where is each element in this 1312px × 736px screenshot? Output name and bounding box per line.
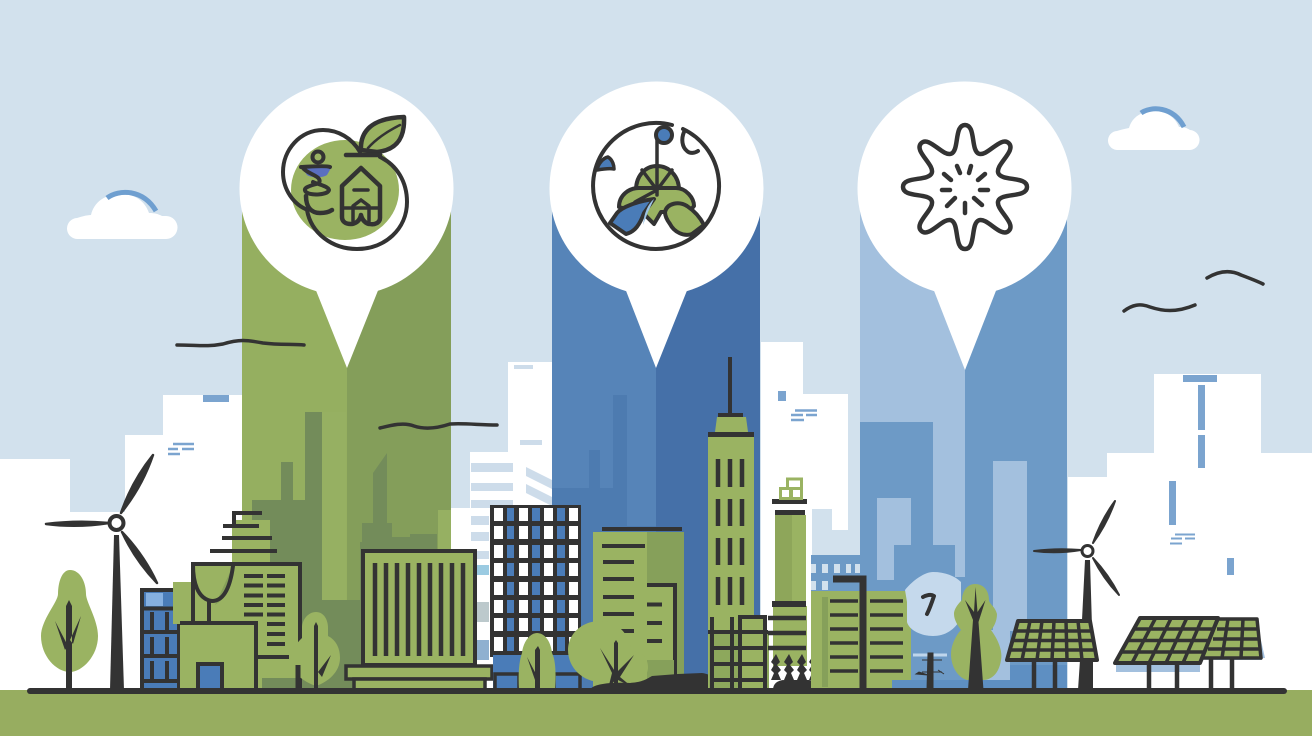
tree: far left — [41, 570, 98, 690]
building: green tall tower — [708, 357, 769, 690]
icon: eight-lobed flower — [903, 125, 1027, 249]
shrubs: dark row — [771, 654, 821, 690]
building: vertical-line block — [346, 551, 492, 690]
small power pylon — [913, 653, 947, 690]
bird line: right lower — [1124, 305, 1195, 311]
panel: dark blue column — [552, 200, 760, 690]
bird line: over green column — [177, 340, 304, 346]
building: green mid-rise — [593, 527, 684, 688]
background building details: centre — [471, 365, 817, 660]
bird line: lower green column — [380, 424, 497, 428]
map pin: light blue — [858, 82, 1072, 370]
map pin: blue — [550, 82, 764, 368]
tree: beside grid tower — [519, 633, 556, 690]
ground mound — [590, 673, 726, 690]
building: green chimney — [768, 479, 807, 666]
building: green right block — [811, 579, 912, 690]
solar panel: left — [1007, 621, 1098, 690]
tree: beside office — [290, 612, 340, 690]
ground line — [27, 688, 1287, 694]
background block with windows — [811, 555, 861, 591]
icon: circle with tree, water and leaves — [593, 123, 719, 249]
panel: green column — [242, 200, 451, 690]
cloud: right — [1108, 109, 1200, 150]
map pin: green — [240, 82, 454, 368]
background building details: left — [168, 395, 229, 454]
tree: round bush — [568, 621, 648, 690]
wind turbine: right — [1034, 501, 1119, 690]
solar panel: right pair — [1115, 618, 1265, 690]
tree: right of panels — [951, 584, 1001, 690]
ground — [0, 690, 1312, 736]
icon: apple with leaf, person and house — [283, 117, 407, 249]
bird line: right upper — [1207, 272, 1263, 284]
panel: light blue column — [860, 200, 1067, 690]
wind turbine: left — [46, 455, 157, 690]
building: blue tower — [142, 590, 179, 690]
building: grid tower — [490, 505, 583, 690]
building: green office with leaf — [173, 513, 300, 690]
pale cloud blob with squiggle — [905, 572, 961, 636]
background building details: right — [1169, 375, 1234, 575]
background white buildings — [0, 342, 1312, 690]
cloud: left — [67, 192, 178, 239]
